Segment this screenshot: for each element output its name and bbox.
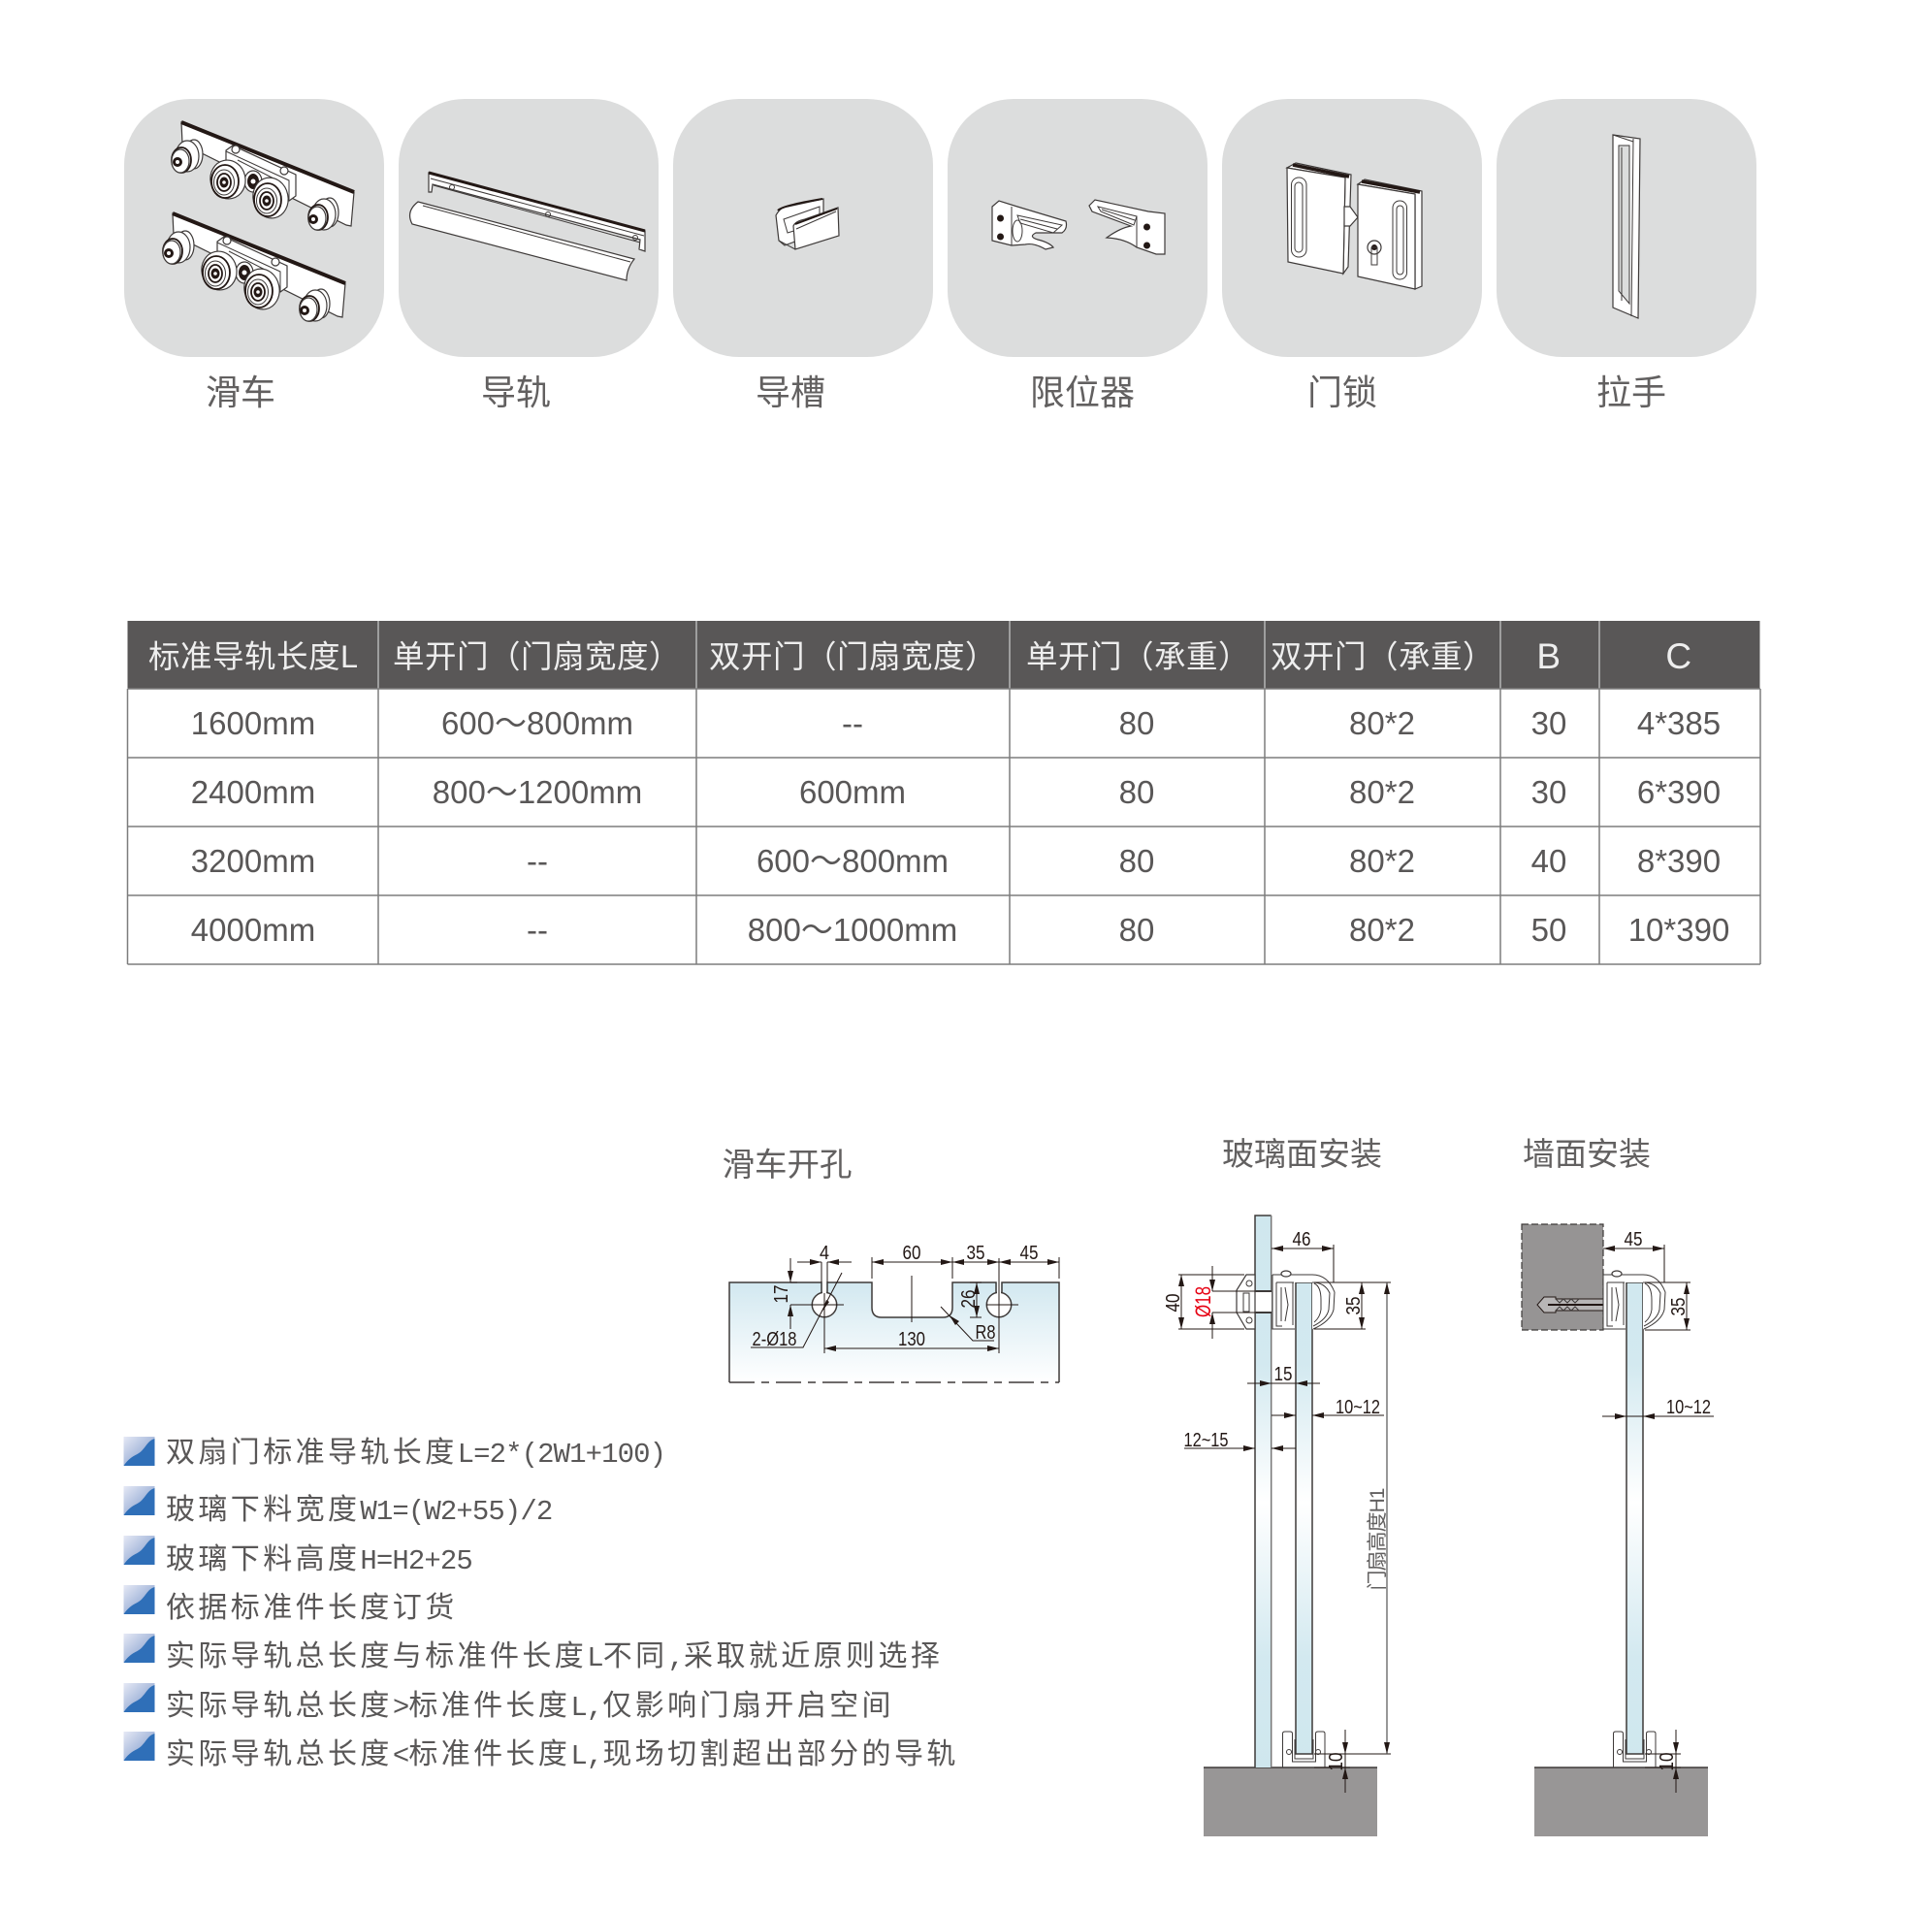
dim 10: 10 <box>1325 1752 1347 1771</box>
track bracket <box>1272 1271 1335 1329</box>
bottom guide clip <box>1282 1732 1325 1767</box>
card: door lock <box>1222 99 1482 412</box>
dim 35: 35 <box>1667 1298 1690 1315</box>
row 1600mm: -- <box>842 705 863 741</box>
dim 35: 35 <box>1342 1296 1365 1315</box>
dim hole diameter: 2-Ø18 <box>753 1328 797 1350</box>
row 4000mm: 80 <box>1119 912 1154 948</box>
dim 15: 15 <box>1274 1363 1292 1385</box>
heading: pulley drilling: 滑车开孔 <box>722 1148 852 1183</box>
drawing: pulley drilling <box>729 1242 1059 1382</box>
glass mounting bolt <box>1237 1275 1272 1329</box>
dim 26 <box>957 1282 980 1317</box>
table header: C <box>1665 636 1692 676</box>
row 2400mm: 6*390 <box>1637 774 1721 810</box>
table header: 双开门（承重） <box>1271 639 1495 674</box>
row 2400mm: 800～1200mm <box>433 774 642 810</box>
table header: 双开门（门扇宽度） <box>709 639 997 674</box>
row 1600mm: 4*385 <box>1637 705 1721 741</box>
dim 15 <box>1247 1363 1320 1385</box>
dim 40: 40 <box>1162 1294 1184 1312</box>
note 5: 实际导轨总长度与标准件长度L不同,采取就近原则选择 <box>166 1632 943 1674</box>
row 3200mm: 40 <box>1531 843 1566 879</box>
note 1: 双扇门标准导轨长度L=2*(2W1+100) <box>166 1428 665 1471</box>
table header: B <box>1536 636 1562 676</box>
dim hole diameter 18: Ø18 <box>1191 1286 1215 1317</box>
icon: upper pulley <box>172 122 354 230</box>
row 2400mm: 600mm <box>799 774 906 810</box>
dim R8 <box>941 1307 995 1344</box>
table header: 标准导轨长度L <box>148 639 359 674</box>
row 1600mm: 80*2 <box>1349 705 1415 741</box>
row 4000mm: 4000mm <box>191 912 315 948</box>
dim 10~12: 10~12 <box>1336 1396 1380 1418</box>
row 3200mm: 600～800mm <box>757 843 949 879</box>
row 2400mm <box>191 774 1721 810</box>
drawing: glass face mount <box>1162 1216 1391 1836</box>
note 6: 实际导轨总长度>标准件长度L,仅影响门扇开启空间 <box>166 1681 894 1724</box>
heading: glass mount: 玻璃面安装 <box>1222 1136 1382 1172</box>
table header <box>128 621 1759 689</box>
dim 35 <box>1667 1282 1690 1330</box>
dim 35 <box>952 1242 999 1264</box>
dim 12~15: 12~15 <box>1183 1429 1228 1451</box>
row 3200mm: 80 <box>1119 843 1154 879</box>
note 2: 玻璃下料宽度W1=(W2+55)/2 <box>166 1485 552 1528</box>
icon: lower pulley <box>163 213 345 321</box>
row 2400mm: 2400mm <box>191 774 315 810</box>
dim 10 <box>1656 1730 1678 1793</box>
door glass panel <box>1296 1282 1312 1754</box>
icon: handle <box>1613 135 1640 318</box>
label: limiter: 限位器 <box>1030 373 1135 412</box>
row 2400mm: 30 <box>1531 774 1566 810</box>
table header: 单开门（门扇宽度） <box>393 639 681 674</box>
label: pulley: 滑车 <box>206 373 275 412</box>
row 4000mm: 80*2 <box>1349 912 1415 948</box>
dim 60 <box>872 1242 952 1264</box>
dim R8: R8 <box>976 1321 995 1344</box>
dim 4: 4 <box>820 1242 829 1264</box>
row 4000mm <box>191 912 1729 948</box>
label: guide slot: 导槽 <box>756 373 825 412</box>
dim 17: 17 <box>770 1284 792 1304</box>
dim 10~12: 10~12 <box>1666 1396 1711 1418</box>
dim 4 <box>797 1242 852 1264</box>
dim 10: 10 <box>1656 1752 1678 1771</box>
dim 40 <box>1162 1275 1184 1329</box>
wall block <box>1522 1224 1603 1330</box>
row 4000mm: 800～1000mm <box>748 912 957 948</box>
row 1600mm <box>191 705 1721 741</box>
row 1600mm: 80 <box>1119 705 1154 741</box>
dim 10~12 <box>1602 1396 1714 1418</box>
dim 45: 45 <box>1624 1228 1643 1250</box>
floor <box>1534 1767 1708 1836</box>
dim 45 <box>1603 1228 1664 1250</box>
row 2400mm: 80*2 <box>1349 774 1415 810</box>
note 3: 玻璃下料高度H=H2+25 <box>166 1535 472 1577</box>
card: rail <box>399 99 659 412</box>
row 3200mm: 3200mm <box>191 843 315 879</box>
dim 45 <box>999 1242 1059 1264</box>
dim 35 <box>1342 1282 1365 1329</box>
row 2400mm: 80 <box>1119 774 1154 810</box>
row 3200mm: -- <box>527 843 548 879</box>
label: handle: 拉手 <box>1596 373 1666 412</box>
dim 45: 45 <box>1020 1242 1038 1264</box>
icon: guide slot <box>776 199 839 249</box>
card: limiter <box>948 99 1208 412</box>
dim 17 <box>770 1258 792 1329</box>
heading: wall mount: 墙面安装 <box>1523 1136 1651 1172</box>
floor <box>1204 1767 1377 1836</box>
note 4: 依据标准件长度订货 <box>166 1583 458 1626</box>
row 3200mm: 80*2 <box>1349 843 1415 879</box>
label: rail: 导轨 <box>481 373 551 412</box>
dim 10 <box>1325 1730 1347 1793</box>
dim 46: 46 <box>1292 1228 1311 1250</box>
icon: rail <box>410 173 645 280</box>
dim 46 <box>1272 1228 1334 1250</box>
card: guide slot <box>673 99 933 412</box>
row 3200mm: 8*390 <box>1637 843 1721 879</box>
row 1600mm: 1600mm <box>191 705 315 741</box>
table header: 单开门（承重） <box>1026 639 1250 674</box>
row 3200mm <box>191 843 1721 879</box>
specification table <box>128 621 1760 964</box>
track bracket <box>1603 1271 1665 1329</box>
row 4000mm: -- <box>527 912 548 948</box>
drawing: wall mount <box>1522 1224 1714 1836</box>
card: pulley <box>124 99 384 412</box>
icon: limiter left <box>992 201 1067 249</box>
notes list <box>124 1428 959 1772</box>
dim 60: 60 <box>902 1242 921 1264</box>
dim hole diameter 18 <box>1191 1266 1215 1339</box>
door glass panel <box>1626 1282 1643 1754</box>
row 1600mm: 600～800mm <box>441 705 633 741</box>
dim 10~12 <box>1272 1396 1384 1418</box>
dim hole diameter <box>751 1273 842 1350</box>
dim 35: 35 <box>966 1242 985 1264</box>
icon: limiter right <box>1089 200 1165 254</box>
dim 12~15 <box>1183 1429 1296 1451</box>
label: door lock: 门锁 <box>1307 373 1377 412</box>
icon: door lock <box>1287 163 1422 289</box>
panel: product cards <box>124 99 1756 412</box>
fixed glass panel <box>1255 1216 1272 1767</box>
row 1600mm: 30 <box>1531 705 1566 741</box>
note 7: 实际导轨总长度<标准件长度L,现场切割超出部分的导轨 <box>166 1730 959 1772</box>
card: handle <box>1497 99 1756 412</box>
row 4000mm: 50 <box>1531 912 1566 948</box>
dim door height H1: 门扇高度H1 <box>1367 1488 1389 1591</box>
dim 26: 26 <box>957 1290 980 1308</box>
dim 130: 130 <box>898 1328 925 1350</box>
bottom guide clip <box>1614 1732 1656 1767</box>
row 4000mm: 10*390 <box>1628 912 1729 948</box>
